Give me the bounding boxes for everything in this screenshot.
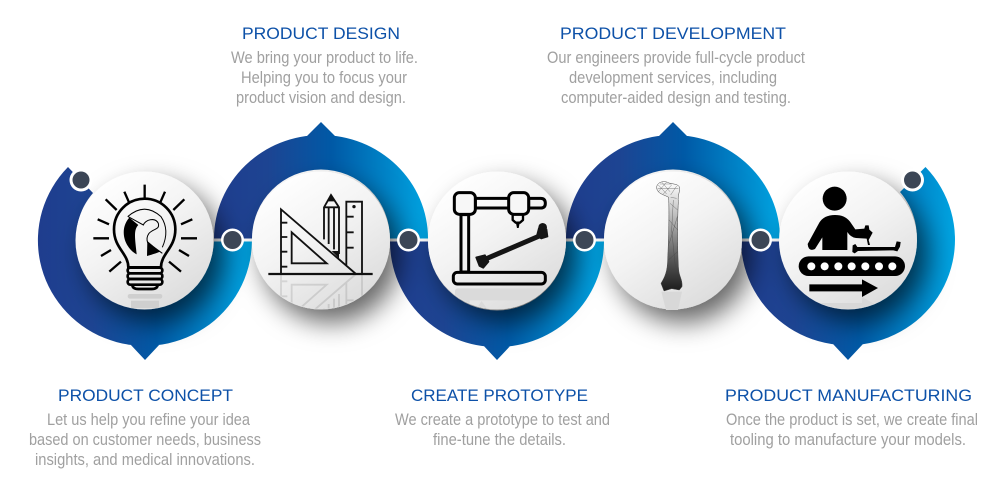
icon: femur mesh model (657, 182, 682, 310)
ring: step 2 arc (214, 122, 428, 238)
worker reflection (820, 298, 866, 309)
text: product design (231, 25, 418, 107)
ring: step 4 arc (566, 122, 780, 238)
conveyor rollers (807, 262, 896, 270)
description: fine-tune the details. (433, 431, 566, 449)
icon: 3D printer printing a bone (453, 193, 548, 311)
description: Helping you to focus your (241, 69, 407, 87)
printer reflection (455, 288, 518, 308)
description: Our engineers provide full-cycle product (547, 49, 805, 67)
printed bone (476, 223, 548, 268)
icon: drafting tools (268, 193, 373, 309)
description: development services, including (569, 69, 777, 87)
description: based on customer needs, business (29, 431, 261, 449)
text: create prototype (395, 387, 610, 449)
text: product manufacturing (725, 387, 978, 449)
printer artwork (453, 193, 548, 284)
worker body and arm (808, 215, 873, 250)
worker artwork (799, 187, 905, 297)
icon: light bulb with bone (93, 185, 197, 308)
femur silhouette (657, 182, 682, 291)
bone on belt (852, 241, 901, 253)
drafting tools artwork (268, 194, 373, 274)
heading: PRODUCT DEVELOPMENT (560, 25, 786, 43)
bulb outline and screw base (114, 199, 175, 289)
ring: step 5 arc (741, 167, 955, 360)
description: insights, and medical innovations. (35, 451, 255, 469)
description (29, 411, 261, 469)
text: product concept (29, 387, 261, 469)
description: We create a prototype to test and (395, 411, 610, 429)
description (547, 49, 805, 107)
bulb reflection (128, 294, 162, 308)
printer nozzle tip (516, 222, 520, 228)
heading: PRODUCT MANUFACTURING (725, 387, 972, 405)
worker head (823, 187, 847, 211)
printer frame (453, 193, 545, 284)
connector nodes (70, 168, 924, 252)
drafting tools reflection (280, 275, 363, 309)
direction arrow (809, 279, 878, 297)
description: computer-aided design and testing. (561, 89, 791, 107)
heading: PRODUCT CONCEPT (58, 387, 233, 405)
ring: step 3 arc (390, 242, 604, 360)
description (395, 411, 610, 449)
description: product vision and design. (236, 89, 406, 107)
femur mesh lines (658, 182, 678, 267)
heading: CREATE PROTOTYPE (411, 387, 588, 405)
heading: PRODUCT DESIGN (242, 25, 400, 43)
icon: worker at conveyor (798, 186, 905, 309)
bone inside bulb (124, 209, 166, 256)
bulb rays (93, 185, 197, 272)
conveyor belt (799, 256, 905, 276)
description: Let us help you refine your idea (47, 411, 251, 429)
text: product development (547, 25, 805, 107)
discs with drop shadow (76, 172, 917, 310)
description: We bring your product to life. (231, 49, 418, 67)
description (231, 49, 418, 107)
femur reflection (661, 292, 682, 310)
description: tooling to manufacture your models. (730, 431, 966, 449)
ring: step 1 arc (38, 167, 252, 360)
description (726, 411, 978, 449)
